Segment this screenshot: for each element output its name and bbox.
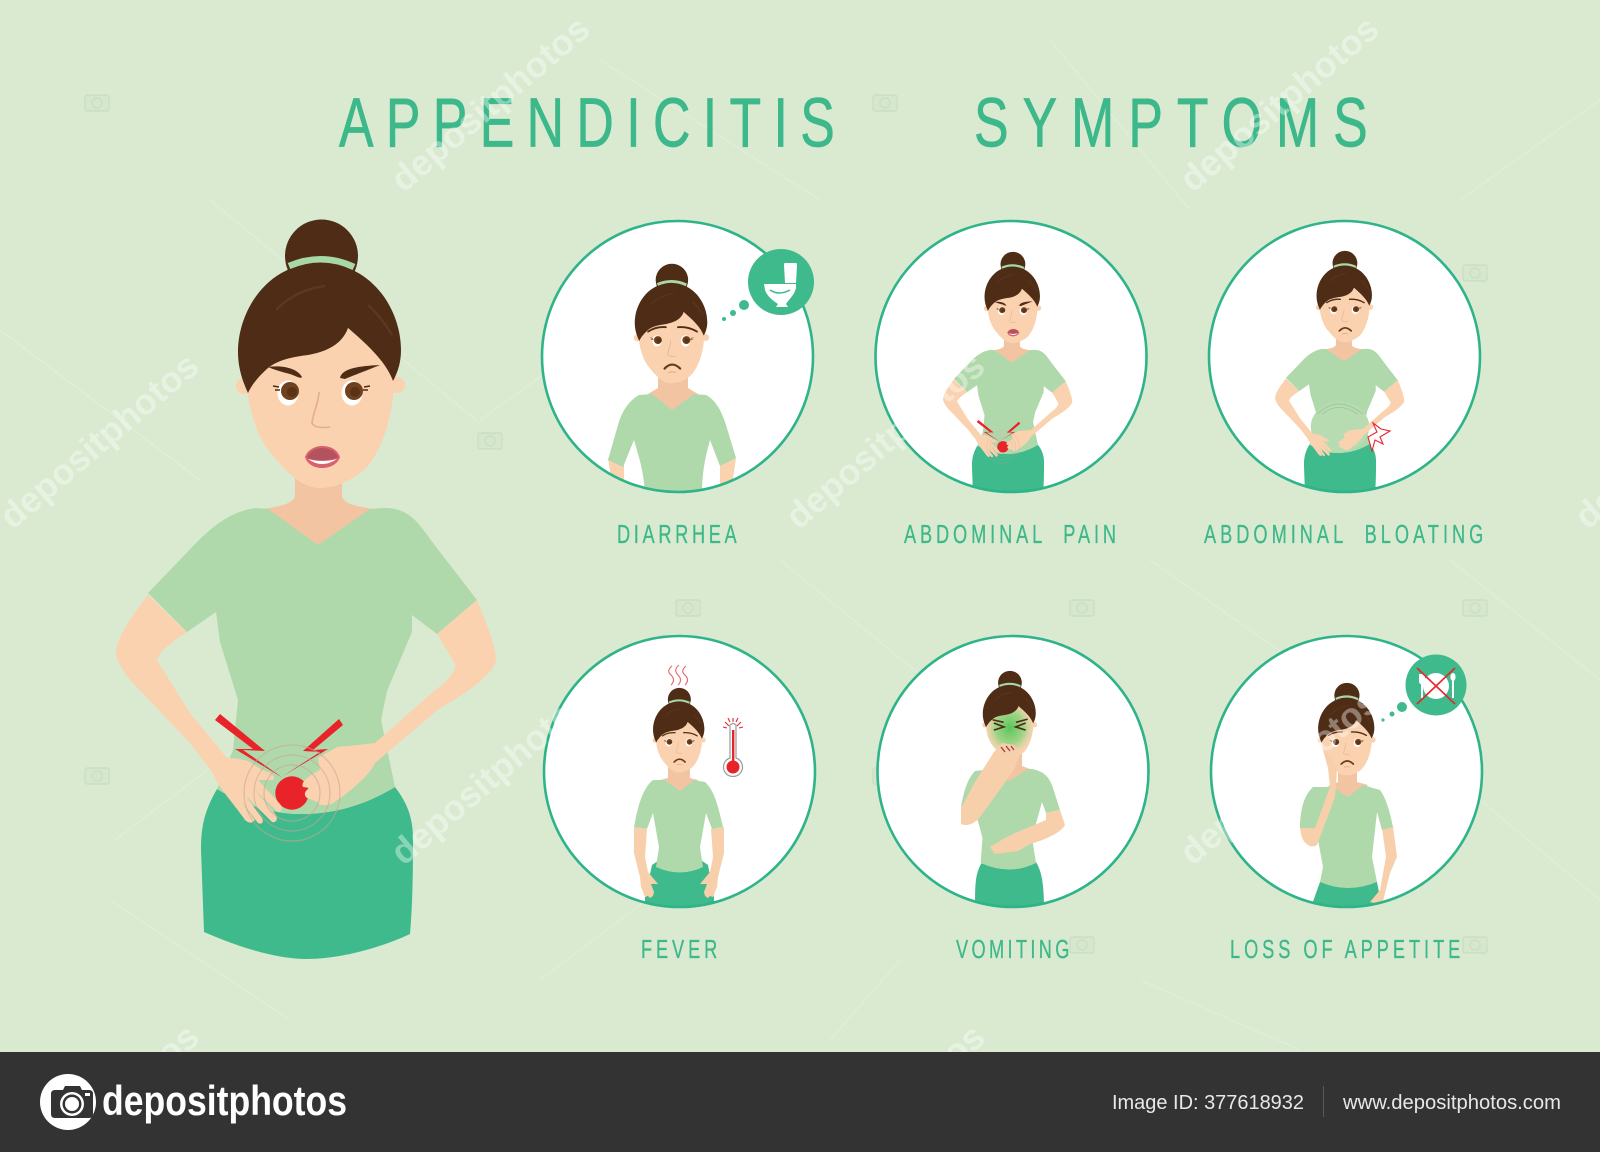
icon: depositphotos logo [40,1074,96,1130]
label: LOSS OF APPETITE [1230,935,1460,964]
title [339,84,1368,162]
panel: diarrhea [542,221,814,549]
woman figure [961,671,1065,910]
pain rings [244,745,340,841]
depositphotos watermarks: depositphotos [1171,680,1386,873]
woman figure [634,688,724,910]
arms and hands [116,595,496,824]
woman figure [943,252,1072,503]
title: SYMPTOMS [974,84,1368,162]
footer bar [0,1052,1600,1152]
website: www.depositphotos.com [1342,1091,1561,1114]
label: ABDOMINAL BLOATING [1204,520,1483,549]
depositphotos watermarks: depositphotos [382,7,597,200]
icon: no food thought bubble [1381,654,1466,722]
woman figure [1275,251,1404,502]
panel: abdominal bloating [1204,221,1483,549]
logo wordmark: depositphotos [102,1077,347,1124]
title: APPENDICITIS [339,84,835,162]
icon: heat waves [669,665,688,685]
main figure: woman with appendicitis pain [116,220,496,959]
panel: abdominal pain [876,221,1146,549]
panel: fever [544,636,815,964]
label: DIARRHEA [617,520,737,549]
icon: thermometer [723,718,743,777]
label: VOMITING [956,935,1069,964]
background camera watermarks [85,95,1487,953]
woman figure [1300,683,1397,910]
icon: pain burst [1368,423,1390,451]
label: ABDOMINAL PAIN [904,520,1116,549]
depositphotos watermarks: depositphotos [777,344,992,537]
label: FEVER [641,935,717,964]
panel: loss of appetite [1211,636,1482,964]
panel: vomiting [878,636,1148,964]
woman figure [608,264,736,495]
head [236,220,405,488]
depositphotos watermarks: depositphotos [1171,7,1386,200]
depositphotos watermarks: depositphotos [382,680,597,873]
appendix pain marker [215,714,343,810]
icon: toilet thought bubble [722,249,814,321]
image id: Image ID: 377618932 [1112,1091,1304,1114]
